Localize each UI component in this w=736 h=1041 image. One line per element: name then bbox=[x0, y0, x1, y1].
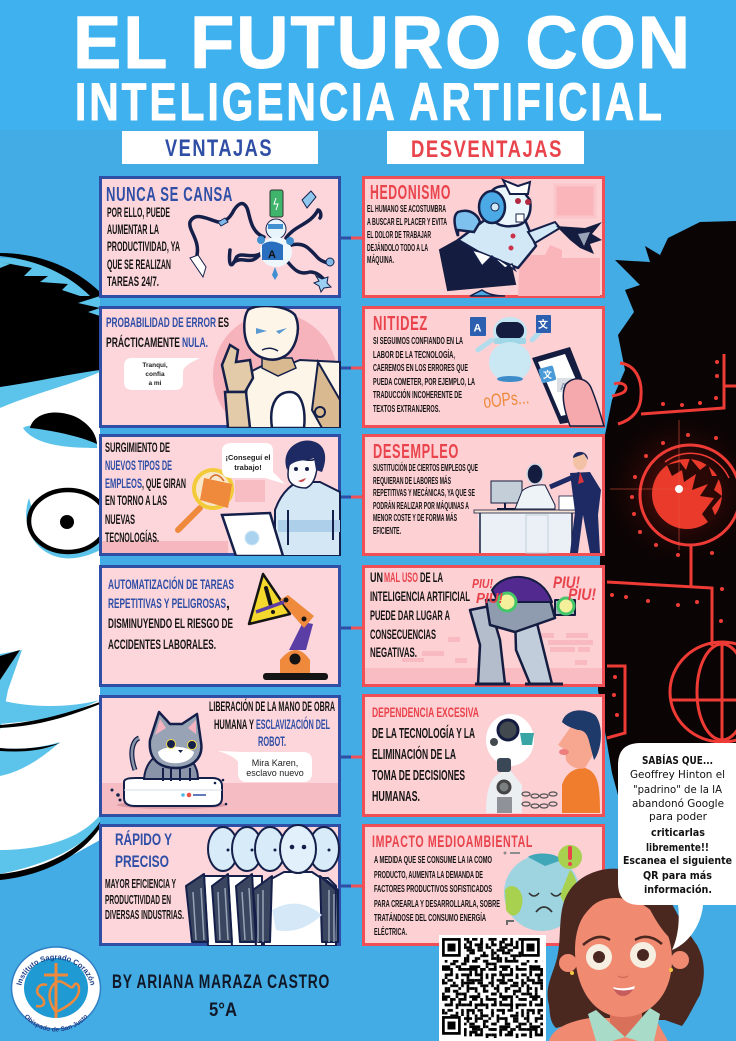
author credit bbox=[112, 972, 330, 1021]
text: automatización: ACCIDENTES LABORALES. bbox=[108, 636, 216, 652]
callout: sabías que: libremente!! bbox=[646, 842, 709, 854]
panel: nuevos empleos bbox=[100, 436, 340, 556]
text: rápido y preciso: DIVERSAS INDUSTRIAS. bbox=[105, 908, 184, 922]
text: nuevos empleos: TECNOLOGÍAS. bbox=[105, 529, 159, 545]
callout: conseguí el trabajo: trabajo! bbox=[234, 463, 262, 472]
text: automatización: DISMINUYENDO EL RIESGO DE bbox=[108, 615, 233, 631]
text: impacto medioambiental: PARA CREARLA Y DESARROLLARLA, SOBRE bbox=[374, 899, 500, 910]
callout: sabías que: criticarlas bbox=[651, 827, 705, 839]
text: nunca se cansa bbox=[107, 204, 180, 289]
callout: tranqui bbox=[124, 358, 200, 390]
label: piu: PIU! bbox=[553, 573, 580, 592]
text: hedonismo: EL DOLOR DE TRABAJAR bbox=[367, 230, 431, 241]
text: hedonismo: A BUSCAR EL PLACER Y EVITA bbox=[367, 217, 447, 228]
panel: desempleo bbox=[364, 436, 604, 554]
text: desempleo: SUSTITUCIÓN DE CIERTOS EMPLEOS QUE bbox=[373, 461, 478, 474]
callout: mira karen: Mira Karen, bbox=[252, 758, 298, 768]
label: piu: PIU! bbox=[472, 576, 494, 591]
callout: sabías que: Geoffrey Hinton el bbox=[630, 769, 725, 781]
icon: phone with translation bbox=[532, 347, 604, 426]
text: hedonismo: EL HUMANO SE ACOSTUMBRA bbox=[367, 204, 446, 215]
text: nunca se cansa: PRODUCTIVIDAD, YA bbox=[107, 238, 180, 254]
icon: sad earth bbox=[504, 845, 582, 931]
text: nitidez: SI SEGUIMOS CONFIANDO EN LA bbox=[373, 335, 463, 347]
panel: probabilidad de error bbox=[100, 306, 340, 437]
heading: nitidez: NITIDEZ bbox=[373, 313, 428, 335]
icon: translator robot and books bbox=[470, 315, 551, 382]
illustration: war robot shooting bbox=[470, 577, 575, 684]
callout: sabías que bbox=[618, 743, 736, 950]
text: nitidez: CAEREMOS EN LOS ERRORES QUE bbox=[373, 362, 468, 374]
text: dependencia: HUMANAS. bbox=[372, 788, 420, 805]
text: hedonismo: DEJÁNDOLO TODO A LA bbox=[367, 241, 428, 254]
text: nitidez bbox=[373, 335, 475, 415]
text: impacto medioambiental: PRODUCTO, AUMENTA LA DEMANDA DE bbox=[374, 870, 483, 881]
callout: mira karen bbox=[218, 751, 312, 782]
text: automatización bbox=[108, 575, 234, 652]
text: nitidez: LABOR DE LA TECNOLOGÍA, bbox=[373, 348, 455, 361]
text: mal uso bbox=[370, 569, 470, 660]
label: oops: oOPs... bbox=[482, 387, 530, 413]
icon: phone with translation: 文 bbox=[543, 369, 552, 380]
panel: nitidez bbox=[364, 308, 604, 426]
icon: octopus robot bbox=[190, 190, 334, 292]
text: probabilidad de error: PROBABILIDAD DE ERROR bbox=[106, 314, 216, 330]
text: nunca se cansa: POR ELLO, PUEDE bbox=[107, 204, 170, 220]
illustration: row of androids bbox=[186, 825, 339, 946]
text: probabilidad de error bbox=[106, 314, 229, 350]
text: mal uso: DE LA bbox=[420, 569, 443, 585]
panel: rápido y preciso bbox=[100, 825, 340, 946]
text: dependencia: DEPENDENCIA EXCESIVA bbox=[372, 704, 479, 720]
icon: translator robot and books: A bbox=[474, 322, 482, 334]
callout: sabías que: abandonó Google bbox=[632, 798, 724, 810]
panel: mal uso bbox=[364, 566, 604, 686]
label: piu: PIU! bbox=[476, 590, 503, 607]
text: nuevos empleos: NUEVAS bbox=[105, 511, 135, 527]
text: rápido y preciso: MAYOR EFICIENCIA Y bbox=[105, 877, 176, 891]
decorative floor bbox=[102, 783, 338, 814]
text: automatización: AUTOMATIZACIÓN DE TAREAS bbox=[108, 575, 234, 592]
panel: hedonismo bbox=[364, 178, 604, 296]
panel: nunca se cansa bbox=[100, 178, 340, 296]
text: impacto medioambiental: ELÉCTRICA. bbox=[374, 925, 407, 938]
heading: rápido y preciso: RÁPIDO Y bbox=[115, 830, 172, 849]
label: piu bbox=[472, 573, 596, 607]
text: liberación: LIBERACIÓN DE LA MANO DE OBRA bbox=[209, 697, 335, 714]
title bbox=[73, 1, 692, 132]
heading: ventajas: VENTAJAS bbox=[165, 135, 273, 162]
illustration: man with laptop bbox=[222, 441, 340, 556]
illustration: robot maid bbox=[440, 180, 602, 296]
text: desempleo: REQUIERAN DE LABORES MÁS bbox=[373, 474, 451, 487]
callout: sabías que: "padrino" de la IA bbox=[633, 784, 723, 796]
text: dependencia bbox=[372, 704, 479, 805]
character: girl bbox=[540, 869, 704, 1041]
text: mal uso: NEGATIVAS. bbox=[370, 644, 417, 660]
text: nuevos empleos: EMPLEOS bbox=[105, 475, 142, 491]
text: liberación: ROBOT. bbox=[258, 733, 286, 749]
text: probabilidad de error: NULA. bbox=[182, 334, 208, 350]
logo: instituto sagrado corazón: Instituto Sagrado Corazón bbox=[16, 955, 94, 986]
text: desempleo: EFICIENTE. bbox=[373, 526, 401, 537]
heading: hedonismo: HEDONISMO bbox=[370, 182, 451, 204]
illustration: cat on robot vacuum bbox=[110, 712, 227, 809]
callout: sabías que: QR para más bbox=[643, 870, 712, 882]
text: liberación bbox=[209, 697, 335, 749]
text: mal uso: INTELIGENCIA ARTIFICIAL bbox=[370, 588, 470, 604]
text: nunca se cansa: AUMENTAR LA bbox=[107, 221, 159, 237]
text: probabilidad de error: ES bbox=[218, 314, 229, 330]
panel: dependencia bbox=[364, 696, 604, 816]
text: automatización: , bbox=[226, 595, 230, 611]
text: nuevos empleos: EN TORNO A LAS bbox=[105, 492, 167, 508]
decorative floor bbox=[365, 668, 602, 684]
author credit: 5°A bbox=[209, 1000, 237, 1021]
callout: conseguí el trabajo: ¡Conseguí el bbox=[225, 453, 271, 462]
text: rápido y preciso: PRODUCTIVIDAD EN bbox=[105, 893, 171, 907]
callout: sabías que: para poder bbox=[649, 811, 708, 823]
icon: magnifier with briefcase bbox=[178, 470, 265, 530]
text: dependencia: TOMA DE DECISIONES bbox=[372, 767, 465, 784]
connectors between panels bbox=[341, 238, 362, 886]
icon: phone with translation: A bbox=[560, 382, 567, 393]
illustration: robot at desk with man bbox=[474, 452, 601, 553]
text: liberación: ESCLAVIZACIÓN DEL bbox=[256, 715, 330, 732]
callout: mira karen: esclavo nuevo bbox=[246, 768, 304, 778]
panel: impacto medioambiental bbox=[364, 826, 604, 944]
panel: liberación bbox=[100, 696, 340, 816]
text: nitidez: PUEDA COMETER, POR EJEMPLO, LA bbox=[373, 376, 475, 388]
qr code bbox=[439, 935, 546, 1041]
callout: tranqui: Tranqui, bbox=[142, 362, 168, 369]
illustration: warning sign and robot arm bbox=[249, 574, 328, 680]
heading: desventajas bbox=[387, 131, 584, 164]
background: cartoon human face bbox=[0, 253, 107, 880]
text: dependencia: ELIMINACIÓN DE LA bbox=[372, 745, 456, 763]
callout: sabías que: información. bbox=[644, 884, 712, 896]
text: mal uso: MAL USO bbox=[384, 569, 418, 585]
text: desempleo: PODRÁN REALIZAR POR MÁQUINAS A bbox=[373, 499, 469, 512]
text: nitidez: TEXTOS EXTRANJEROS. bbox=[373, 403, 440, 415]
heading: rápido y preciso: PRECISO bbox=[115, 852, 169, 871]
callout: tranqui: confia bbox=[145, 371, 165, 378]
illustration: robot chained to man bbox=[486, 710, 601, 813]
logo: instituto sagrado corazón bbox=[10, 946, 102, 1032]
decorative bricks bbox=[402, 633, 593, 665]
illustration: android thinking bbox=[213, 306, 340, 437]
text: nuevos empleos: SURGIMIENTO DE bbox=[105, 439, 170, 455]
callout: sabías que: SABÍAS QUE... bbox=[642, 754, 713, 767]
text: desempleo: MENOR COSTE Y DE FORMA MÁS bbox=[373, 511, 457, 524]
text: nunca se cansa: QUE SE REALIZAN bbox=[107, 256, 171, 272]
text: hedonismo bbox=[367, 204, 447, 266]
decorative floor bbox=[102, 541, 228, 553]
text: liberación: HUMANA Y bbox=[214, 716, 254, 732]
title: EL FUTURO CON bbox=[73, 1, 692, 84]
heading: desventajas: DESVENTAJAS bbox=[411, 136, 563, 163]
text: nuevos empleos: , QUE GIRAN bbox=[142, 475, 186, 491]
text: mal uso: UN bbox=[370, 569, 383, 585]
text: impacto medioambiental bbox=[374, 855, 500, 938]
text: nunca se cansa: TAREAS 24/7. bbox=[107, 273, 159, 289]
heading: impacto medioambiental: IMPACTO MEDIOAMBIENTAL bbox=[372, 832, 533, 851]
author credit: BY ARIANA MARAZA CASTRO bbox=[112, 972, 330, 993]
text: automatización: REPETITIVAS Y PELIGROSAS bbox=[108, 595, 226, 611]
text: nuevos empleos: NUEVOS TIPOS DE bbox=[105, 457, 172, 473]
text: desempleo: REPETITIVAS Y MECÁNICAS, YA QUE SE bbox=[373, 486, 475, 499]
text: impacto medioambiental: TRATÁNDOSE DEL CONSUMO ENERGÍA bbox=[374, 911, 486, 924]
callout: conseguí el trabajo bbox=[222, 443, 285, 484]
callout: tranqui: a mi bbox=[148, 380, 162, 387]
title band bbox=[0, 0, 736, 130]
text: probabilidad de error: PRÁCTICAMENTE bbox=[106, 334, 180, 350]
text: mal uso: CONSECUENCIAS bbox=[370, 626, 436, 642]
logo: instituto sagrado corazón: Obispado de San Justo bbox=[25, 1014, 88, 1032]
heading: nunca se cansa: NUNCA SE CANSA bbox=[106, 184, 233, 206]
label: piu: PIU! bbox=[568, 585, 596, 604]
background: robot head with red circuits bbox=[595, 221, 736, 810]
text: dependencia: DE LA TECNOLOGÍA Y LA bbox=[372, 725, 475, 742]
text: nitidez: TRADUCCIÓN INCOHERENTE DE bbox=[373, 388, 462, 401]
heading: desempleo: DESEMPLEO bbox=[373, 441, 459, 463]
text: desempleo bbox=[373, 461, 478, 537]
panel: automatización bbox=[100, 566, 340, 686]
text: hedonismo: MÁQUINA. bbox=[367, 253, 394, 266]
text: impacto medioambiental: A MEDIDA QUE SE CONSUME LA IA COMO bbox=[374, 855, 492, 866]
text: nuevos empleos bbox=[105, 439, 186, 545]
icon: translator robot and books: 文 bbox=[538, 318, 548, 331]
text: mal uso: PUEDE DAR LUGAR A bbox=[370, 607, 450, 623]
heading: rápido y preciso bbox=[115, 830, 172, 871]
text: rápido y preciso bbox=[105, 877, 184, 922]
text: impacto medioambiental: FACTORES PRODUCTIVOS SOFISTICADOS bbox=[374, 884, 492, 895]
icon: octopus robot: A bbox=[268, 249, 276, 261]
heading: ventajas bbox=[122, 131, 318, 164]
